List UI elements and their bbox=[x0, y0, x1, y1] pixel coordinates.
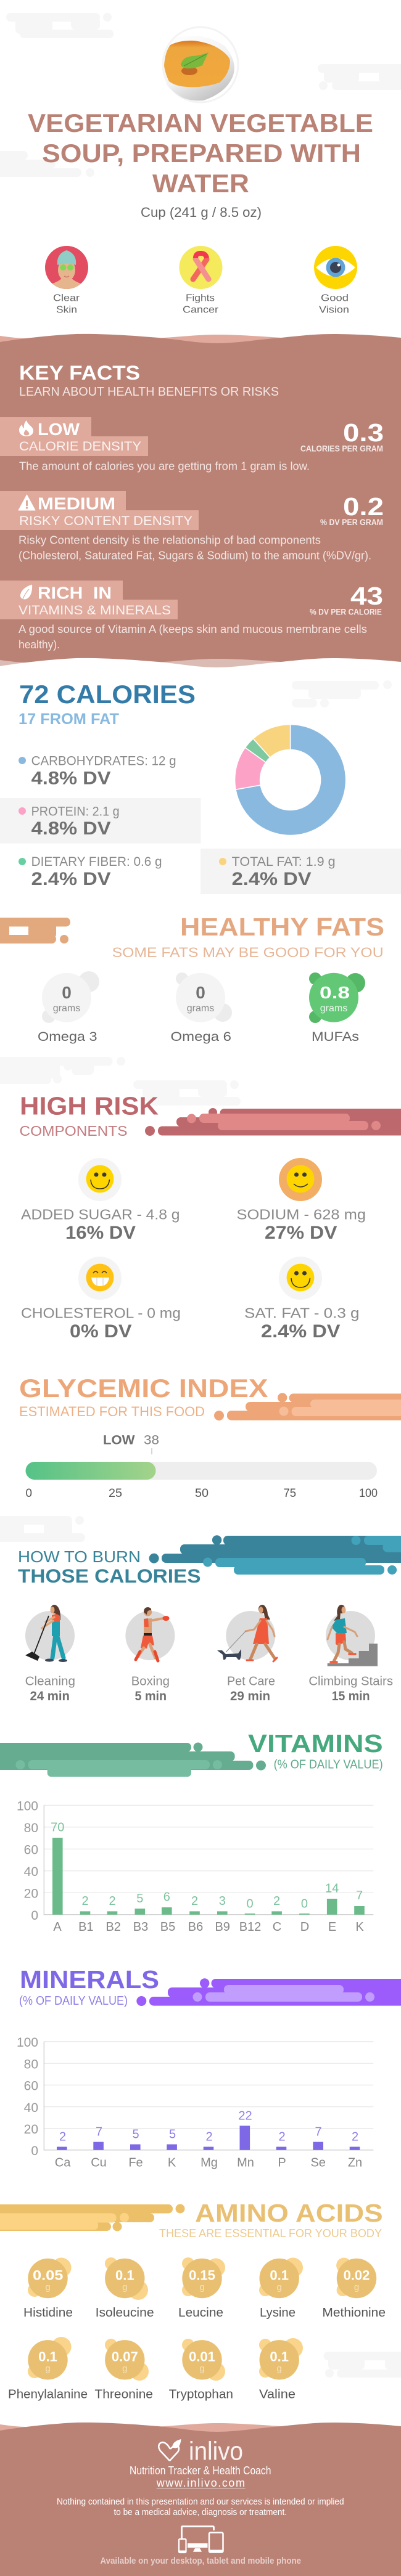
chart: minerals: 5 bbox=[169, 2128, 176, 2142]
chart: minerals: 100 bbox=[17, 2036, 38, 2050]
subheading: SOME FATS MAY BE GOOD FOR YOU bbox=[112, 945, 384, 960]
amino: leucine bbox=[178, 2257, 225, 2320]
heading: GLYCEMIC INDEX bbox=[19, 1374, 268, 1403]
amino: isoleucine: Isoleucine bbox=[96, 2306, 154, 2320]
fat: mufas: grams bbox=[320, 1003, 347, 1014]
disclaimer: to be a medical advice, diagnosis or treatment. bbox=[114, 2508, 287, 2517]
chart: vitamins: 70 bbox=[51, 1820, 64, 1834]
chart: vitamins: 3 bbox=[219, 1894, 226, 1908]
chart: minerals: 5 bbox=[132, 2128, 139, 2142]
chart: minerals: Zn bbox=[348, 2156, 362, 2170]
fact: rich in vitamins and minerals: VITAMINS & MINERALS bbox=[19, 603, 171, 618]
panel: key facts bbox=[0, 334, 401, 677]
nutrient: carbohydrates bbox=[19, 754, 176, 789]
subheading: COMPONENTS bbox=[20, 1123, 127, 1139]
activity: boxing: Boxing bbox=[131, 1674, 170, 1689]
amino: methionine: g bbox=[354, 2282, 359, 2293]
nutrient: protein bbox=[19, 805, 120, 839]
banner: vitamins bbox=[0, 1743, 266, 1777]
chart: vitamins: 100 bbox=[17, 1800, 38, 1813]
chart: vitamins: D bbox=[300, 1920, 309, 1934]
component: added sugar: ADDED SUGAR - 4.8 g bbox=[21, 1207, 180, 1223]
chart: minerals: 0 bbox=[31, 2144, 38, 2158]
activity: pet care: 29 min bbox=[230, 1689, 270, 1703]
gauge label: 38 bbox=[144, 1433, 159, 1448]
amino: histidine bbox=[23, 2258, 73, 2320]
chart: vitamins: B3 bbox=[133, 1920, 148, 1934]
amino: phenylalanine bbox=[8, 2337, 88, 2402]
panel: footer bbox=[0, 2423, 401, 2576]
image: soup bowl bbox=[163, 27, 238, 102]
website: www.inlivo.com bbox=[156, 2477, 245, 2489]
subheading: (% OF DAILY VALUE) bbox=[19, 1994, 128, 2008]
fact: medium risky content density: 0.2 bbox=[343, 492, 384, 521]
fact: low calorie density: LOW bbox=[38, 420, 80, 439]
fact: rich in vitamins and minerals: A good source of Vitamin A (keeps skin and mucous membrane cells bbox=[19, 623, 367, 635]
subheading: THESE ARE ESSENTIAL FOR YOUR BODY bbox=[159, 2227, 382, 2240]
benefit: good vision: Good bbox=[321, 293, 349, 303]
chart: minerals bbox=[17, 2036, 373, 2170]
chart: vitamins: 20 bbox=[24, 1887, 38, 1901]
availability note: Available on your desktop, tablet and mobile phone bbox=[100, 2556, 301, 2566]
activity: pet care: Pet Care bbox=[227, 1674, 275, 1689]
panel: how to burn calories bbox=[0, 1516, 401, 1703]
chart: vitamins: 0 bbox=[31, 1909, 38, 1923]
nutrient: total fat: 2.4% DV bbox=[232, 869, 312, 889]
chart: minerals: 2 bbox=[205, 2130, 213, 2144]
amino: lysine: 0.1 bbox=[270, 2267, 289, 2283]
fat: omega 3: 0 bbox=[62, 983, 72, 1002]
chart: vitamins: 0 bbox=[246, 1897, 254, 1911]
serving size: Cup (241 g / 8.5 oz) bbox=[141, 205, 262, 220]
fact: rich in vitamins and minerals bbox=[0, 581, 383, 651]
nutrient: protein: 4.8% DV bbox=[31, 818, 111, 839]
subheading: ESTIMATED FOR THIS FOOD bbox=[19, 1404, 205, 1419]
banner: minerals bbox=[136, 1978, 401, 2006]
fat: omega 6 bbox=[170, 972, 232, 1044]
panel: healthy fats bbox=[0, 913, 384, 1044]
fact: low calorie density: The amount of calories you are getting from 1 gram is low. bbox=[19, 460, 310, 472]
panel: vitamins bbox=[0, 1729, 383, 1934]
component: saturated fat bbox=[244, 1257, 359, 1342]
gauge scale: 100 bbox=[359, 1487, 378, 1500]
subheading: LEARN ABOUT HEALTH BENEFITS OR RISKS bbox=[19, 385, 279, 399]
chart: vitamins: B5 bbox=[160, 1920, 175, 1934]
fat: omega 6: grams bbox=[187, 1003, 214, 1014]
nutrient: total fat: TOTAL FAT: 1.9 g bbox=[232, 855, 336, 869]
amino: tryptophan: g bbox=[199, 2363, 205, 2374]
amino: lysine: Lysine bbox=[260, 2306, 296, 2320]
amino: leucine: Leucine bbox=[178, 2306, 223, 2320]
benefit: fights cancer: Fights bbox=[186, 293, 215, 303]
amino: phenylalanine: g bbox=[45, 2363, 51, 2374]
heading: HEALTHY FATS bbox=[180, 913, 384, 941]
component: cholesterol bbox=[21, 1257, 181, 1342]
chart: vitamins: B12 bbox=[239, 1920, 261, 1934]
nutrient: carbohydrates: 4.8% DV bbox=[31, 768, 111, 789]
chart: vitamins: 5 bbox=[136, 1892, 143, 1906]
chart: minerals: 7 bbox=[315, 2125, 322, 2138]
gauge scale: 75 bbox=[284, 1487, 296, 1500]
component: added sugar bbox=[21, 1158, 180, 1243]
heading: MINERALS bbox=[20, 1965, 159, 1994]
background clouds: header bbox=[0, 13, 401, 177]
activity: boxing: 5 min bbox=[134, 1689, 167, 1703]
nutrient: total fat bbox=[219, 855, 336, 889]
amino: phenylalanine: Phenylalanine bbox=[8, 2388, 88, 2402]
chart: minerals: 2 bbox=[352, 2130, 358, 2144]
chart: vitamins: A bbox=[53, 1920, 62, 1934]
benefit: clear skin bbox=[45, 246, 88, 316]
gauge scale bbox=[26, 1487, 378, 1500]
component: sodium: 27% DV bbox=[265, 1223, 337, 1243]
nutrient: dietary fiber bbox=[19, 855, 162, 889]
amino: lysine: g bbox=[277, 2282, 282, 2293]
chart: minerals: Fe bbox=[128, 2156, 143, 2170]
fact: medium risky content density: MEDIUM bbox=[38, 494, 115, 513]
nutrient: carbohydrates: CARBOHYDRATES: 12 g bbox=[31, 754, 176, 768]
amino: threonine bbox=[94, 2339, 153, 2402]
title: VEGETARIAN VEGETABLE bbox=[28, 108, 373, 137]
panel: how to burn calories: THOSE CALORIES bbox=[18, 1565, 201, 1587]
amino: tryptophan: Tryptophan bbox=[169, 2388, 233, 2402]
panel: minerals bbox=[17, 1965, 401, 2170]
fat: mufas: 0.8 bbox=[320, 983, 350, 1002]
chart: minerals: Se bbox=[310, 2156, 326, 2170]
chart: minerals: 22 bbox=[238, 2109, 252, 2122]
heading: AMINO ACIDS bbox=[195, 2199, 383, 2227]
panel: glycemic index bbox=[19, 1374, 401, 1500]
logo: inlivo bbox=[159, 2437, 243, 2466]
gauge scale: 25 bbox=[109, 1487, 122, 1500]
amino: lysine bbox=[259, 2258, 303, 2320]
chart: minerals: Ca bbox=[55, 2156, 71, 2170]
chart: minerals: 40 bbox=[24, 2101, 38, 2115]
heading: key facts: KEY FACTS bbox=[19, 362, 140, 384]
chart: vitamins: 2 bbox=[273, 1894, 280, 1908]
fact: rich in vitamins and minerals: % DV PER CALORIE bbox=[310, 606, 382, 616]
gauge label bbox=[103, 1433, 159, 1454]
title: WATER bbox=[152, 169, 249, 198]
component: sodium: SODIUM - 628 mg bbox=[237, 1207, 366, 1223]
benefit: fights cancer bbox=[179, 246, 222, 316]
fat: omega 3 bbox=[38, 971, 99, 1044]
chart: minerals: Mn bbox=[237, 2156, 254, 2170]
amino: isoleucine: g bbox=[122, 2282, 127, 2293]
logo: inlivo: inlivo bbox=[189, 2437, 243, 2466]
title: SOUP, PREPARED WITH bbox=[42, 139, 361, 168]
chart: vitamins: C bbox=[273, 1920, 281, 1934]
chart: vitamins: 80 bbox=[24, 1821, 38, 1835]
amino: methionine: Methionine bbox=[322, 2306, 386, 2320]
chart: vitamins: B9 bbox=[215, 1920, 230, 1934]
amino: histidine: g bbox=[45, 2282, 51, 2293]
chart: vitamins: E bbox=[328, 1920, 336, 1934]
chart: vitamins: 6 bbox=[163, 1891, 170, 1904]
tagline: Nutrition Tracker & Health Coach bbox=[130, 2464, 271, 2477]
amino: threonine: 0.07 bbox=[112, 2349, 138, 2365]
gauge scale: 0 bbox=[26, 1487, 32, 1500]
amino: phenylalanine: 0.1 bbox=[38, 2349, 57, 2365]
amino: methionine: 0.02 bbox=[344, 2267, 370, 2283]
chart: minerals: 7 bbox=[96, 2125, 102, 2138]
banner: burn bbox=[149, 1535, 401, 1575]
chart: vitamins: 60 bbox=[24, 1843, 38, 1857]
banner: amino acids bbox=[0, 2204, 185, 2231]
gauge label: LOW bbox=[103, 1433, 135, 1448]
amino: isoleucine: 0.1 bbox=[115, 2267, 134, 2283]
fact: medium risky content density: % DV PER GRAM bbox=[320, 517, 383, 527]
component: cholesterol: CHOLESTEROL - 0 mg bbox=[21, 1305, 181, 1321]
amino: valine: g bbox=[277, 2363, 282, 2374]
heading: HOW TO BURN bbox=[18, 1549, 141, 1566]
panel: calories bbox=[0, 680, 401, 894]
fact: low calorie density: CALORIES PER GRAM bbox=[300, 444, 383, 454]
component: sodium bbox=[237, 1158, 366, 1243]
chart: macronutrient donut bbox=[235, 725, 346, 836]
fact: rich in vitamins and minerals: healthy). bbox=[19, 638, 60, 651]
fact: medium risky content density: (Cholesterol, Saturated Fat, Sugars & Sodium) to the amount (%DV/gr). bbox=[19, 550, 371, 562]
activity: climbing stairs: Climbing Stairs bbox=[308, 1674, 393, 1689]
disclaimer: Nothing contained in this presentation and our services is intended or implied bbox=[57, 2497, 344, 2507]
chart: minerals: 80 bbox=[24, 2057, 38, 2072]
fat: mufas: MUFAs bbox=[312, 1030, 359, 1044]
chart: minerals: 60 bbox=[24, 2079, 38, 2093]
chart: minerals: 2 bbox=[278, 2130, 286, 2144]
amino: threonine: g bbox=[122, 2363, 127, 2374]
fat: omega 6: Omega 6 bbox=[170, 1030, 231, 1044]
chart: vitamins: 2 bbox=[109, 1894, 116, 1908]
amino: leucine: g bbox=[199, 2282, 205, 2293]
fat: omega 3: Omega 3 bbox=[38, 1030, 97, 1044]
fact: rich in vitamins and minerals: 43 bbox=[350, 582, 383, 610]
chart: vitamins: 40 bbox=[24, 1865, 38, 1879]
amino: tryptophan: 0.01 bbox=[189, 2349, 215, 2365]
component: saturated fat: 2.4% DV bbox=[261, 1321, 341, 1342]
activity: climbing stairs: 15 min bbox=[332, 1689, 370, 1703]
banner: high risk bbox=[145, 1108, 401, 1136]
fat: omega 3: grams bbox=[53, 1003, 80, 1014]
amino: histidine: Histidine bbox=[23, 2306, 73, 2320]
component: saturated fat: SAT. FAT - 0.3 g bbox=[244, 1305, 359, 1321]
amino: tryptophan bbox=[169, 2339, 233, 2402]
chart: minerals: P bbox=[278, 2156, 286, 2170]
activity: cleaning: Cleaning bbox=[25, 1674, 75, 1689]
chart: vitamins: 7 bbox=[356, 1889, 363, 1902]
chart: vitamins: B1 bbox=[78, 1920, 94, 1934]
chart: vitamins: B6 bbox=[188, 1920, 203, 1934]
fact: low calorie density: CALORIE DENSITY bbox=[19, 439, 141, 454]
benefit: clear skin: Skin bbox=[56, 304, 77, 316]
chart: vitamins: K bbox=[355, 1920, 364, 1934]
nutrient: protein: PROTEIN: 2.1 g bbox=[31, 805, 120, 819]
chart: vitamins: B2 bbox=[105, 1920, 121, 1934]
amino: valine bbox=[259, 2338, 303, 2402]
chart: vitamins bbox=[17, 1800, 373, 1934]
amino: threonine: Threonine bbox=[94, 2388, 153, 2402]
icon: devices bbox=[179, 2527, 223, 2553]
heading: VITAMINS bbox=[248, 1729, 383, 1758]
chart: vitamins: 14 bbox=[325, 1882, 339, 1896]
amino: isoleucine bbox=[96, 2257, 154, 2320]
chart: minerals: 20 bbox=[24, 2122, 38, 2137]
heading: 72 calories: 72 CALORIES bbox=[19, 680, 196, 709]
banner: healthy fats bbox=[0, 918, 70, 944]
benefit: good vision: Vision bbox=[319, 304, 349, 316]
chart: minerals: Cu bbox=[91, 2156, 107, 2170]
grey rows bbox=[0, 798, 401, 894]
chart: vitamins: 0 bbox=[301, 1897, 308, 1911]
chart: minerals: 2 bbox=[59, 2130, 66, 2144]
fact: low calorie density bbox=[0, 417, 384, 472]
gauge scale: 50 bbox=[195, 1487, 209, 1500]
amino: histidine: 0.05 bbox=[33, 2267, 63, 2283]
amino: valine: Valine bbox=[259, 2388, 296, 2402]
chart: minerals: Mg bbox=[200, 2156, 218, 2170]
fact: medium risky content density bbox=[0, 491, 384, 562]
component: added sugar: 16% DV bbox=[65, 1223, 136, 1243]
benefit: good vision bbox=[314, 246, 357, 316]
activity: cleaning bbox=[25, 1605, 75, 1703]
amino: leucine: 0.15 bbox=[189, 2267, 215, 2283]
fact: rich in vitamins and minerals: RICH IN bbox=[38, 583, 112, 602]
fat: omega 6: 0 bbox=[196, 983, 205, 1002]
title bbox=[28, 108, 373, 198]
fact: medium risky content density: Risky Content density is the relationship of bad components bbox=[19, 534, 321, 546]
panel: amino acids bbox=[0, 2199, 401, 2402]
banner: glycemic bbox=[214, 1393, 401, 1420]
fact: low calorie density: 0.3 bbox=[343, 418, 384, 447]
amino: valine: 0.1 bbox=[270, 2349, 289, 2365]
activity: cleaning: 24 min bbox=[30, 1689, 70, 1703]
component: cholesterol: 0% DV bbox=[70, 1321, 132, 1342]
disclaimer bbox=[57, 2497, 344, 2517]
subheading: (% OF DAILY VALUE) bbox=[274, 1758, 383, 1772]
fat: mufas bbox=[309, 972, 365, 1044]
activity: pet care bbox=[217, 1605, 277, 1703]
activity: boxing bbox=[125, 1607, 175, 1703]
benefit: fights cancer: Cancer bbox=[183, 304, 219, 316]
benefit: clear skin: Clear bbox=[53, 293, 80, 303]
heading: HIGH RISK bbox=[20, 1092, 159, 1120]
chart: vitamins: 2 bbox=[191, 1894, 198, 1908]
panel: high risk components bbox=[0, 1057, 401, 1342]
activity: climbing stairs bbox=[308, 1605, 393, 1703]
gauge bar bbox=[26, 1462, 377, 1480]
amino: methionine bbox=[322, 2258, 386, 2320]
nutrient: dietary fiber: 2.4% DV bbox=[31, 869, 111, 889]
fact: medium risky content density: RISKY CONTENT DENSITY bbox=[19, 513, 192, 528]
chart: minerals: K bbox=[168, 2156, 176, 2170]
subheading: from fat: 17 FROM FAT bbox=[19, 711, 119, 728]
chart: vitamins: 2 bbox=[81, 1894, 89, 1908]
nutrient: dietary fiber: DIETARY FIBER: 0.6 g bbox=[31, 855, 162, 869]
